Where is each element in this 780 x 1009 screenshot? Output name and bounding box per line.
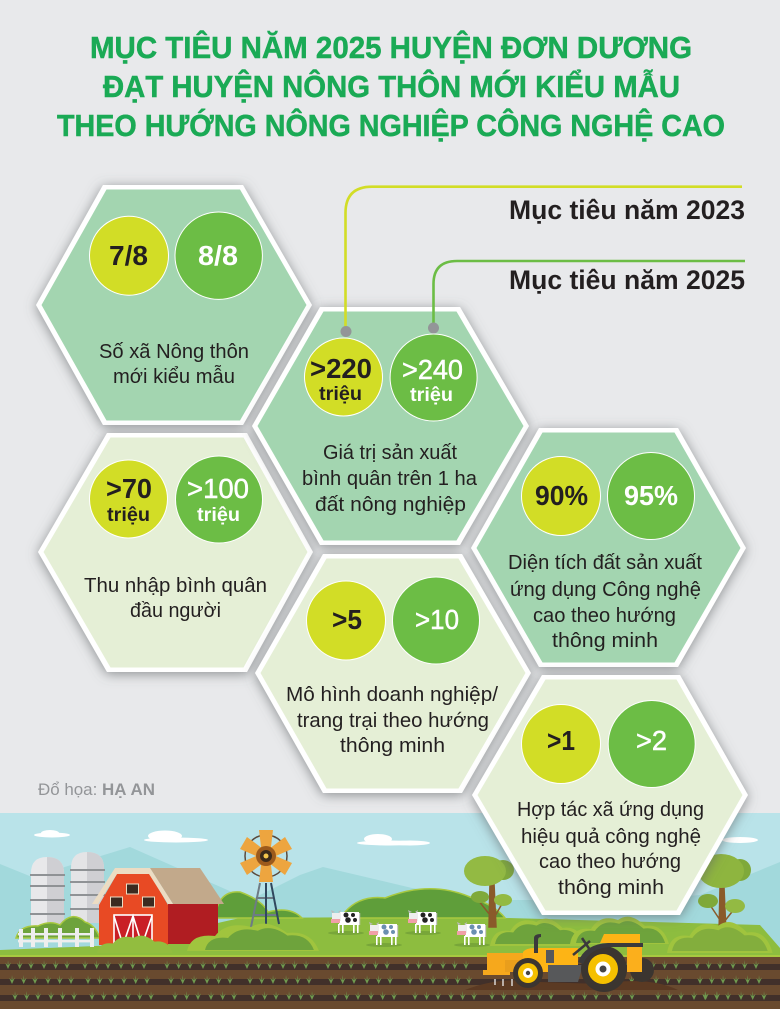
panel: gia tri san xuat: đất nông nghiệp [315, 493, 466, 516]
panel: gia tri san xuat: Giá trị sản xuất [323, 441, 457, 464]
panel: so xa nong thon moi: 8/8 [198, 240, 238, 271]
panel: gia tri san xuat [252, 307, 529, 545]
panel: mo hinh doanh nghiep: trang trại theo hướng [297, 709, 489, 732]
panel: dien tich dat cong nghe cao: thông minh [552, 629, 658, 652]
panel: thu nhap binh quan: triệu [107, 504, 150, 526]
panel: thu nhap binh quan: Thu nhập bình quân [84, 574, 267, 597]
silos [30, 852, 105, 927]
panel: thu nhap binh quan: đầu người [130, 599, 221, 622]
title: ĐẠT HUYỆN NÔNG THÔN MỚI KIỂU MẪU [103, 68, 680, 104]
panel: gia tri san xuat: bình quân trên 1 ha [302, 467, 478, 490]
mountains [0, 847, 780, 960]
panel: gia tri san xuat: triệu [319, 383, 362, 405]
panel: hop tac xa: thông minh [558, 876, 664, 899]
panel: dien tich dat cong nghe cao: 90% [535, 480, 588, 511]
panel: mo hinh doanh nghiep [255, 554, 531, 793]
panel: so xa nong thon moi [36, 185, 312, 425]
panel: hop tac xa [472, 675, 748, 915]
soil rows [0, 955, 780, 1009]
panel: so xa nong thon moi: Số xã Nông thôn [99, 340, 249, 363]
panel: gia tri san xuat: triệu [410, 384, 453, 406]
panel: thu nhap binh quan: >100 [187, 473, 249, 504]
panel: so xa nong thon moi: mới kiểu mẫu [113, 365, 235, 388]
panel: hop tac xa: >2 [636, 725, 667, 756]
legend: Mục tiêu năm 2025 [509, 265, 745, 295]
panel: dien tich dat cong nghe cao: Diện tích đất sản xuất [508, 551, 702, 574]
fence [18, 928, 94, 947]
panel: gia tri san xuat: >220 [310, 353, 372, 384]
farm scene illustration [0, 813, 780, 1009]
panel: mo hinh doanh nghiep: >5 [332, 604, 362, 635]
credit: Đổ họa: HẠ AN [38, 780, 155, 799]
tractor [465, 934, 678, 992]
panel: thu nhap binh quan: triệu [197, 504, 240, 526]
windmill [240, 830, 292, 933]
panel: thu nhap binh quan: >70 [106, 473, 152, 504]
panel: dien tich dat cong nghe cao: ứng dụng Công nghệ [510, 578, 701, 601]
bushes behind fence [16, 917, 100, 938]
title [57, 29, 725, 143]
clouds [34, 830, 758, 846]
panel: so xa nong thon moi: 7/8 [109, 240, 148, 271]
seedlings [5, 960, 767, 1000]
barn [92, 868, 224, 947]
panel: hop tac xa: >1 [547, 725, 575, 756]
panel: dien tich dat cong nghe cao: cao theo hướng [533, 604, 676, 627]
legend: Mục tiêu năm 2023 [509, 195, 745, 225]
panel: hop tac xa: cao theo hướng [539, 850, 681, 873]
panel: thu nhap binh quan [38, 433, 313, 672]
panel: mo hinh doanh nghiep: >10 [415, 604, 459, 635]
panel: hop tac xa: hiệu quả công nghệ [521, 825, 701, 848]
panel: mo hinh doanh nghiep: thông minh [340, 734, 445, 757]
trees [464, 854, 751, 933]
cows [328, 910, 490, 947]
panel: dien tich dat cong nghe cao [471, 428, 746, 667]
legend [509, 195, 745, 295]
panel: gia tri san xuat: >240 [402, 354, 463, 385]
panel: hop tac xa: Hợp tác xã ứng dụng [517, 798, 704, 821]
foreground bushes [97, 917, 773, 953]
title: MỤC TIÊU NĂM 2025 HUYỆN ĐƠN DƯƠNG [90, 29, 692, 65]
panel: mo hinh doanh nghiep: Mô hình doanh nghiệp/ [286, 683, 498, 706]
title: THEO HƯỚNG NÔNG NGHIỆP CÔNG NGHỆ CAO [57, 107, 725, 143]
connector lines to legend [340, 187, 745, 337]
panel: dien tich dat cong nghe cao: 95% [624, 480, 678, 511]
hills [0, 917, 780, 958]
